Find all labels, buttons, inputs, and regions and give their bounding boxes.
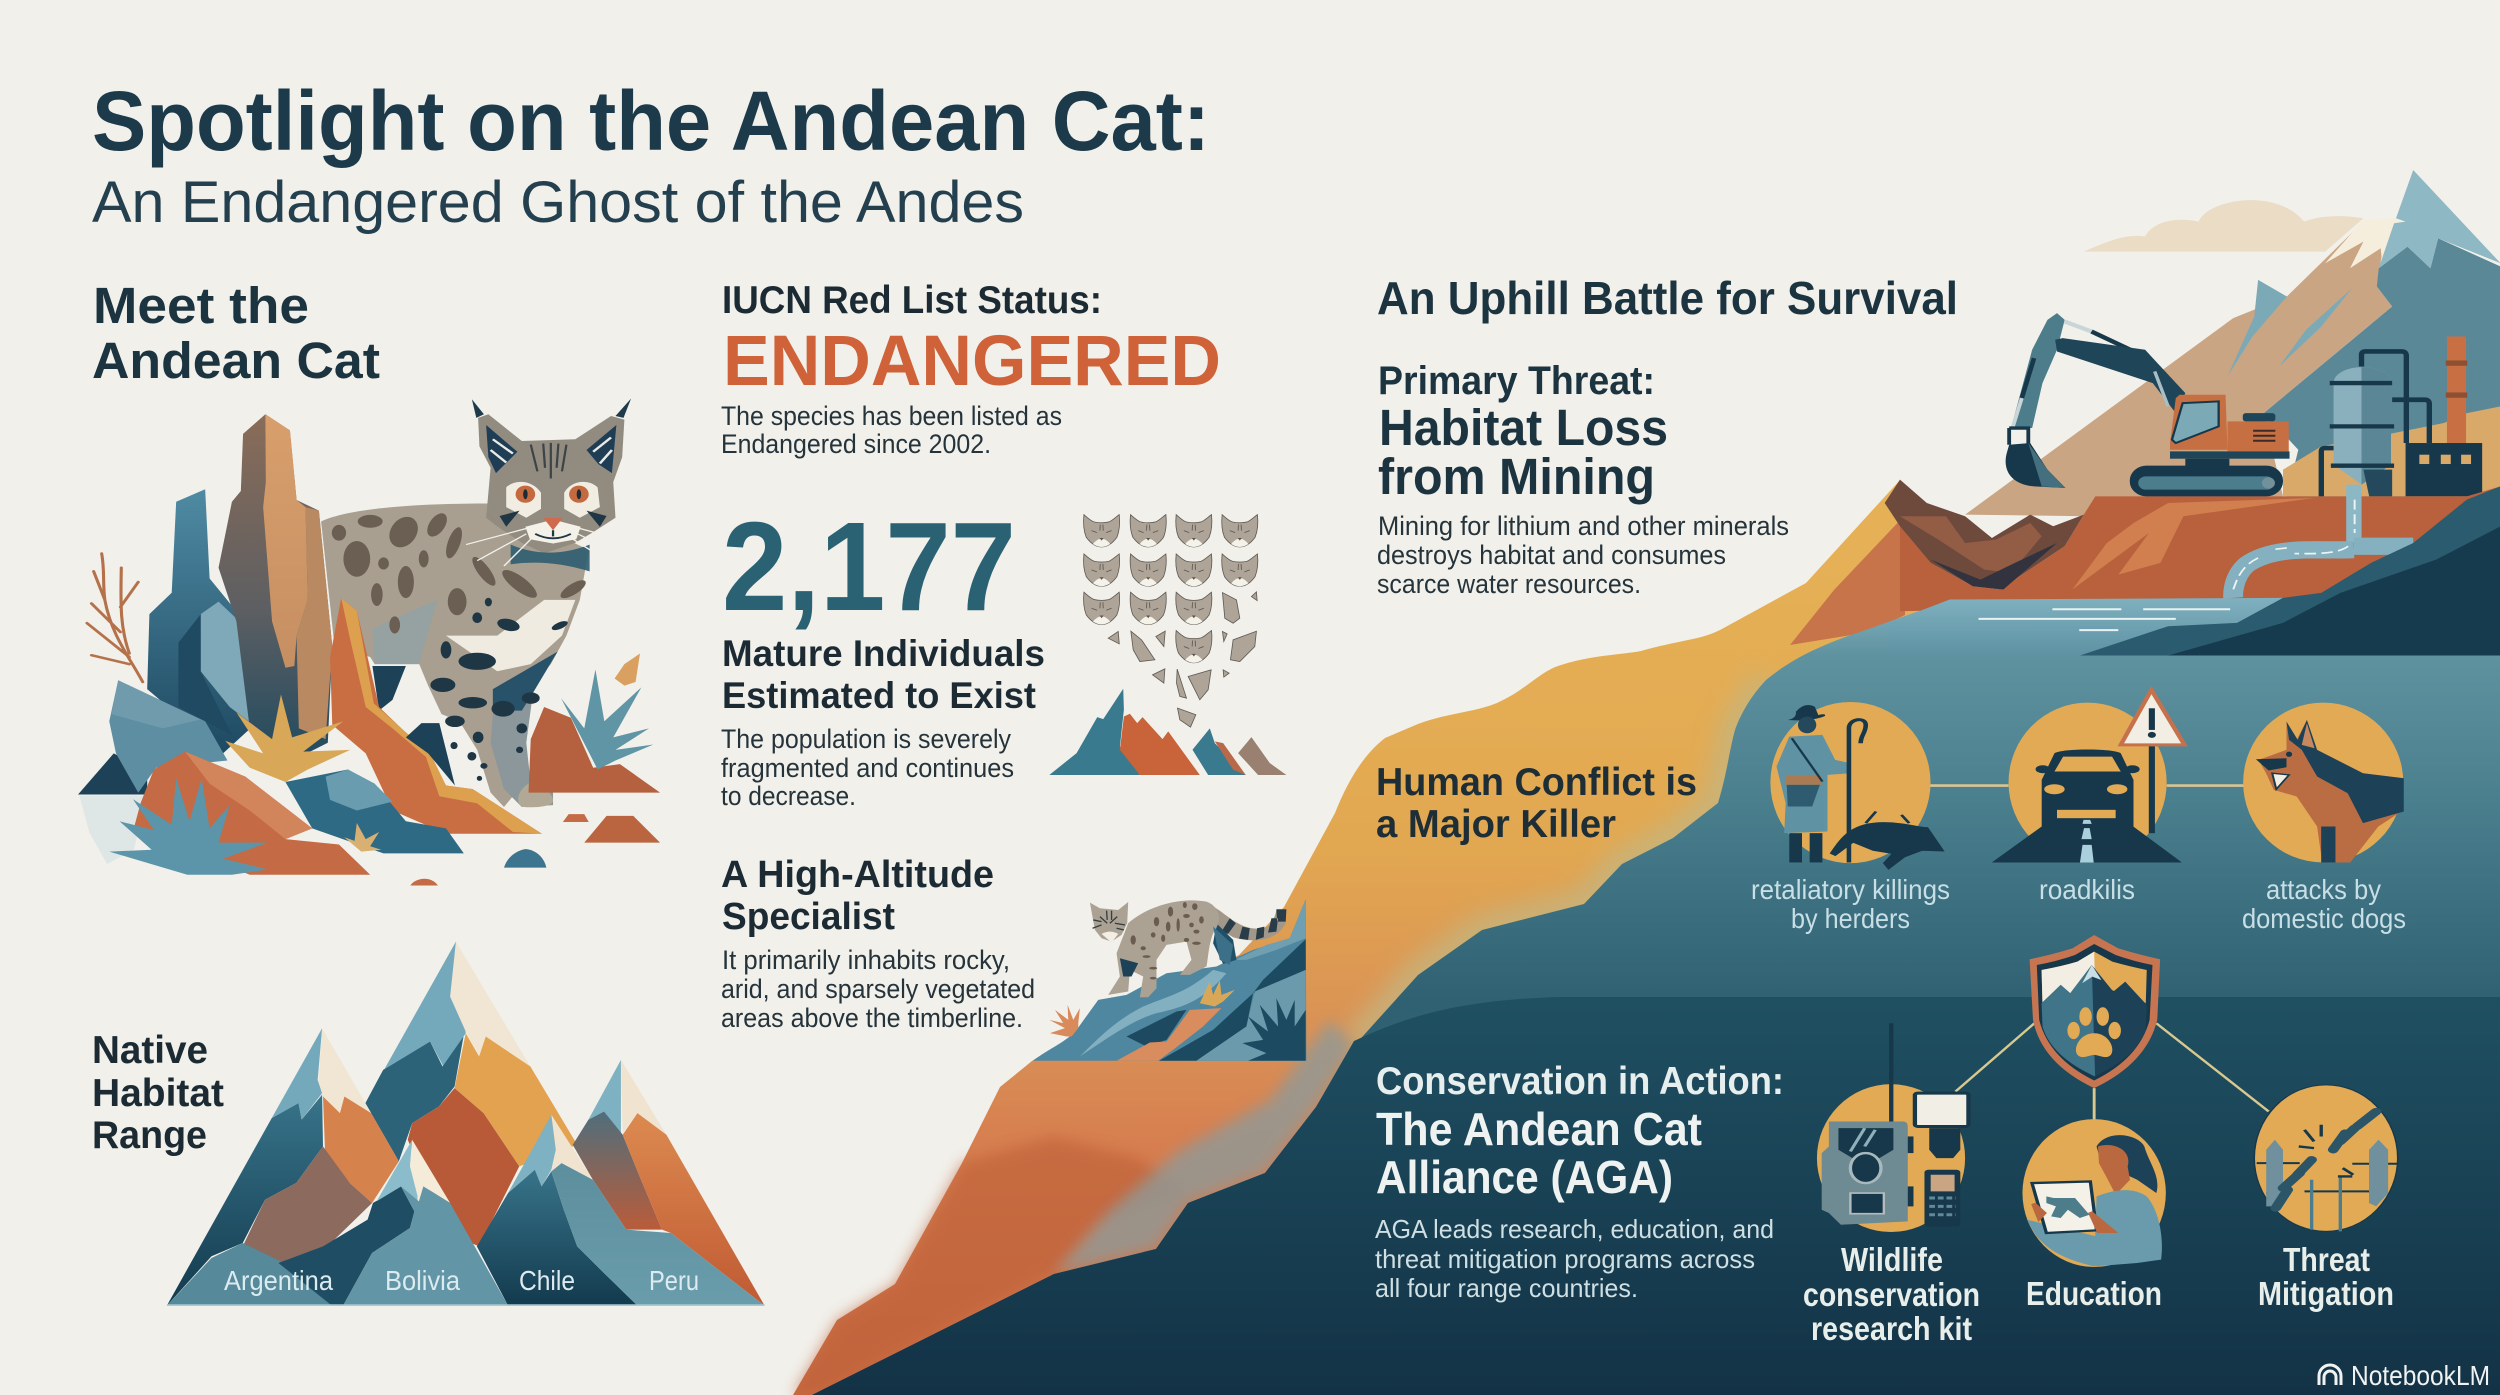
cat body [321,504,589,807]
icon: fading cat faces over mountains [1049,515,1286,775]
panel: high-altitude specialist text [721,854,1035,1033]
heading: Meet the Andean Cat: Meet the [93,277,309,334]
ground hatch [79,796,147,864]
heading: Native Habitat Range [92,1029,224,1157]
statistic description [721,724,1014,811]
status value: ENDANGERED [723,322,1221,401]
alliance labels: Education [2026,1275,2162,1312]
lake and pipe [1889,485,2413,655]
conservation heading [1376,1103,1702,1203]
description: areas above the timberline. [721,1003,1023,1033]
description [721,945,1035,1033]
heading: Human Conflict is a Major Killer: a Major Killer [1376,803,1616,846]
panel: uphill slope background [793,480,2500,1395]
threat description: scarce water resources. [1377,569,1641,599]
alliance labels: Threat [2283,1241,2370,1278]
threat heading: from Mining [1378,448,1655,505]
eroded ground and crater [1885,480,2500,611]
factory [2321,336,2482,496]
conservation description: all four range countries. [1375,1273,1638,1303]
statistic label: Estimated to Exist [722,675,1036,716]
soft yellow-to-teal transition edge [1354,680,1766,1046]
threat heading: Habitat Loss [1379,399,1668,456]
mountains [167,942,765,1306]
conflict labels: attacks by [2266,874,2381,905]
title block [92,74,1210,235]
plants [109,653,653,875]
statistic description: The population is severely [721,724,1011,754]
description: It primarily inhabits rocky, [722,945,1010,975]
dark conservation zone [812,997,2500,1395]
cat head [466,399,633,571]
connector lines [1956,1023,2269,1120]
conservation description: threat mitigation programs across [1375,1244,1755,1274]
icon: broken chain and fence [2254,1085,2398,1231]
heading: An Uphill Battle for Survival: An Uphill Battle for Survival [1377,272,1958,324]
description: arid, and sparsely vegetated [721,974,1035,1004]
heading: Specialist [722,896,895,938]
country labels: Argentina [224,1265,333,1296]
panel: IUCN status [721,279,1221,459]
icon: aggressive dog [2243,703,2404,862]
heading: Native Habitat Range: Range [92,1114,207,1157]
conflict labels: domestic dogs [2242,903,2406,934]
threat description: Mining for lithium and other minerals [1378,511,1789,541]
heading: Native Habitat Range: Native [92,1029,208,1072]
icon: dry twig [87,553,143,682]
illustration: mining scene [1885,170,2500,655]
alliance labels [1803,1241,2394,1347]
panel: population statistic [721,496,1045,811]
alliance labels: conservation [1803,1276,1980,1313]
grass tuft [1049,1005,1080,1036]
icon: shield with paw [2030,935,2160,1088]
alliance labels: research kit [1811,1310,1972,1347]
icon: herder with dead cat [1770,702,1942,868]
threat description: destroys habitat and consumes [1377,540,1726,570]
chart: four-country mountain range [167,942,765,1306]
icon: car on road with warning sign [1992,690,2184,862]
status description: Endangered since 2002. [721,429,991,459]
statistic description: fragmented and continues [721,753,1014,783]
grey blend band [1054,1020,1354,1274]
connector lines [1930,782,2245,790]
teal threat zone [812,600,2500,1395]
heading: Human Conflict is a Major Killer: Human Conflict is [1376,761,1697,804]
conflict labels [1751,874,2406,934]
orange and yellow hill [793,480,1960,1395]
conservation description: AGA leads research, education, and [1375,1214,1774,1244]
panel: primary threat text [1377,359,1789,599]
conservation heading: Alliance (AGA) [1376,1151,1673,1203]
heading: Meet the Andean Cat: Andean Cat [92,332,380,389]
panel: conservation alliance diagram [1803,935,2398,1347]
big number: 2,177 [722,496,1016,637]
dark foreground rocks [2080,486,2500,655]
background mountains [1965,170,2500,516]
alliance labels: Mitigation [2258,1275,2394,1312]
hill interior orange wedge [1790,515,1905,645]
main title: Spotlight on the Andean Cat: [92,74,1210,168]
heading: Native Habitat Range: Habitat [92,1072,224,1115]
heading [721,854,994,938]
country labels [224,1265,699,1296]
threat description [1377,511,1789,599]
country labels: Bolivia [385,1265,460,1296]
illustration: cat on rocky outcrop [1033,899,1306,1061]
heading: Meet the Andean Cat [92,277,380,389]
conservation label: Conservation in Action: [1376,1060,1784,1103]
rock outcrop [1033,899,1306,1061]
panel: conservation text [1375,1060,1784,1303]
conservation heading: The Andean Cat [1376,1103,1702,1155]
conflict labels: roadkilis [2039,874,2135,905]
icon: education with tablet [2022,1119,2166,1267]
conservation description [1375,1214,1774,1303]
heading: A High-Altitude [721,854,994,896]
excavator [2006,313,2290,496]
rock formation [78,414,660,886]
darker lower hill shade [793,1137,1188,1395]
status description: The species has been listed as [721,401,1062,431]
statistic label [722,633,1045,716]
heading: Human Conflict is a Major Killer [1376,761,1697,846]
status description [721,401,1062,459]
alliance labels: Wildlife [1841,1241,1943,1278]
country labels: Peru [649,1265,699,1296]
threat label: Primary Threat: [1378,359,1655,403]
icon: wildlife camera kit [1817,1023,1968,1232]
conflict labels: retaliatory killings [1751,874,1950,905]
threat heading [1378,399,1668,505]
illustration: Andean cat among rocks [78,399,660,886]
statistic description: to decrease. [721,781,856,811]
status label: IUCN Red List Status: [722,279,1102,322]
cloud [2084,200,2363,252]
conflict labels: by herders [1791,903,1910,934]
country labels: Chile [519,1265,575,1296]
statistic label: Mature Individuals [722,633,1045,674]
panel: human conflict icons [1751,690,2406,934]
subtitle: An Endangered Ghost of the Andes [92,170,1024,235]
walking cat [1090,900,1286,997]
